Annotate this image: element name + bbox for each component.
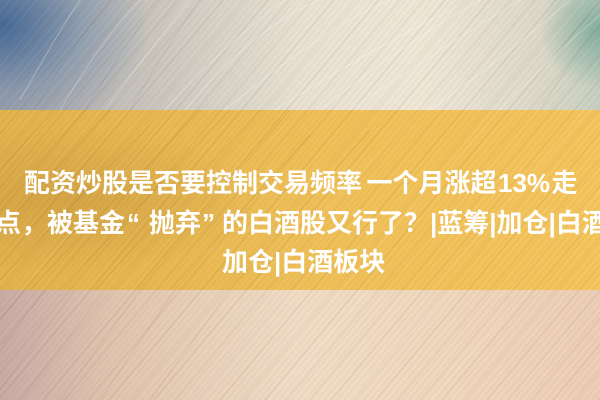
title line 1: 配资炒股是否要控制交易频率	[24, 168, 362, 198]
title line 2: 的白酒股又行了？|蓝筹|加仓|白酒	[222, 208, 600, 238]
background top panel: blue to cream brushed texture	[0, 0, 600, 110]
title line 2: ”	[202, 208, 215, 238]
yellow title band	[0, 110, 600, 290]
background bottom panel: peach brushed texture	[0, 290, 600, 400]
title line 1	[24, 168, 578, 198]
title text	[0, 168, 600, 277]
title line 1: 一个月涨超	[366, 168, 497, 198]
title line 2: 抛弃	[149, 208, 201, 238]
title line 3: 加仓|白酒板块	[222, 247, 385, 277]
title line 2	[0, 208, 600, 238]
title line 1: 走	[552, 168, 578, 198]
title line 2: “	[127, 208, 140, 238]
title line 1: 13%	[498, 168, 550, 198]
